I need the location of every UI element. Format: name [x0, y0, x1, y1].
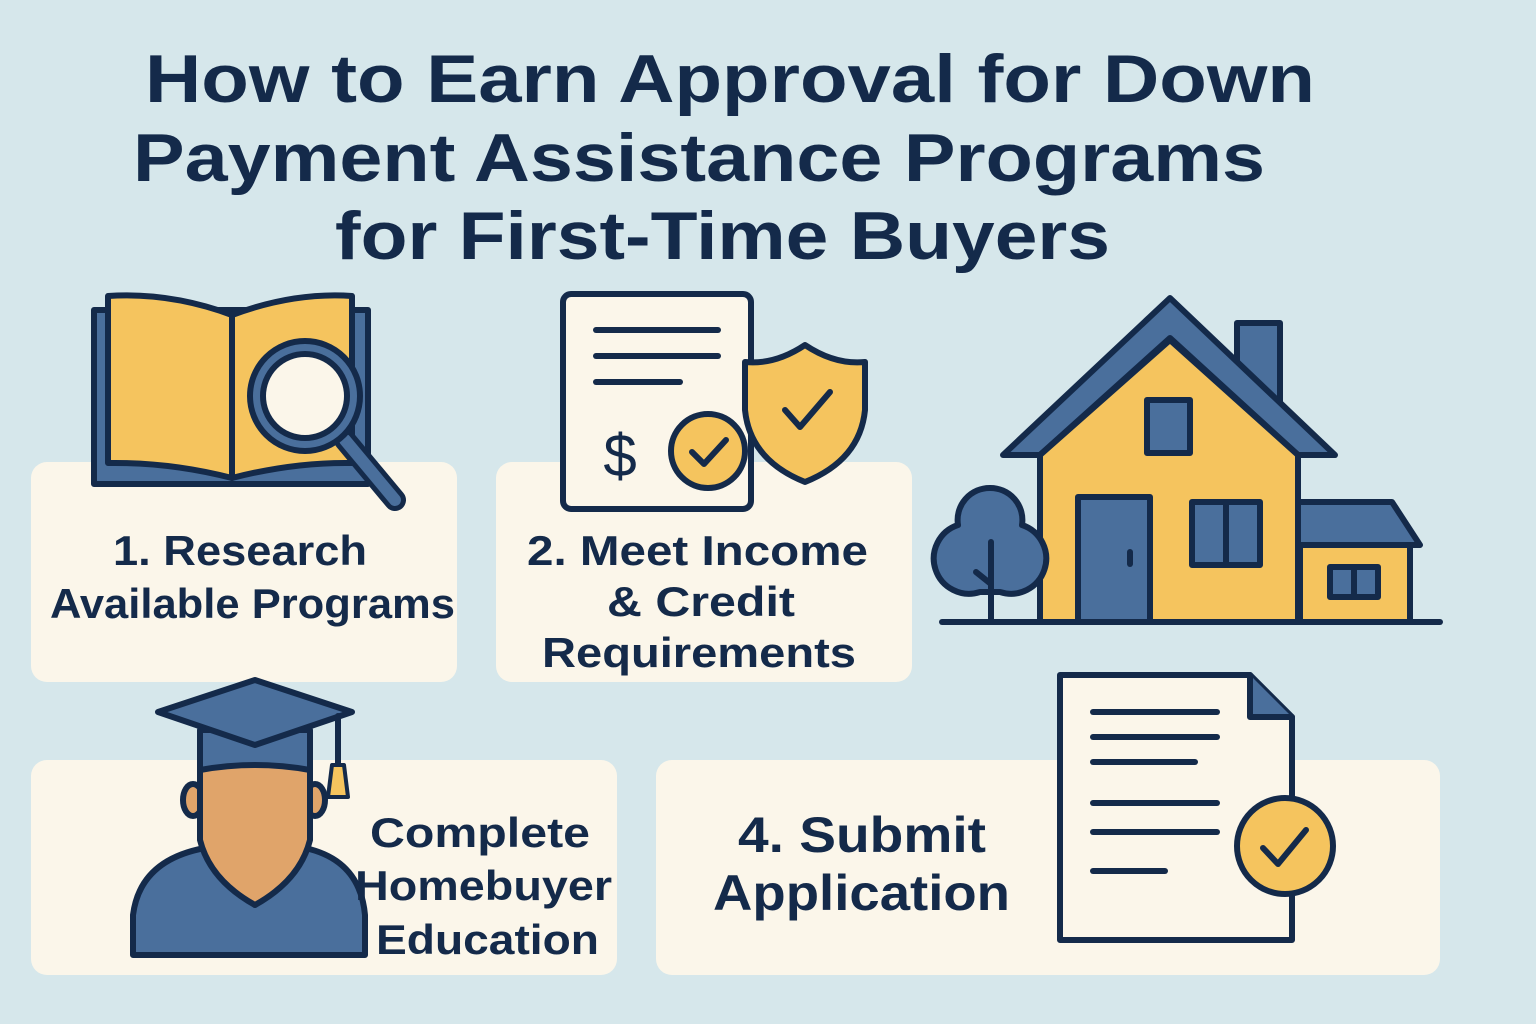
text: step 1: 1. Research — [113, 527, 367, 574]
panel: income card — [496, 294, 912, 682]
text: step 3 — [355, 809, 612, 963]
text: step 4 — [713, 807, 1010, 921]
text: step 3: Education — [376, 916, 599, 963]
text: step 4: 4. Submit — [738, 807, 986, 863]
icon: house — [934, 298, 1440, 622]
text: step 4: Application — [713, 865, 1010, 921]
panel: submit card — [656, 675, 1440, 975]
text: step 2: 2. Meet Income — [527, 527, 868, 574]
text: step 1 — [50, 527, 455, 627]
panel: education card — [31, 680, 617, 975]
text: step 3: Complete — [370, 809, 590, 856]
icon: document with shield — [563, 294, 865, 509]
title — [133, 41, 1315, 274]
text: step 1: Available Programs — [50, 580, 455, 627]
icon: book with magnifier — [94, 295, 395, 500]
text: step 3: Homebuyer — [355, 862, 612, 909]
title: for First-Time Buyers — [335, 198, 1110, 274]
text: step 2: & Credit — [607, 578, 795, 625]
panel: research card — [31, 295, 457, 682]
icon: graduate — [133, 680, 365, 955]
text: step 2: Requirements — [542, 629, 856, 676]
icon: application document — [1060, 675, 1333, 940]
title: How to Earn Approval for Down — [145, 41, 1315, 117]
title: Payment Assistance Programs — [133, 120, 1265, 196]
text: step 2 — [527, 527, 868, 676]
icon: document with shield: $ — [603, 422, 637, 489]
